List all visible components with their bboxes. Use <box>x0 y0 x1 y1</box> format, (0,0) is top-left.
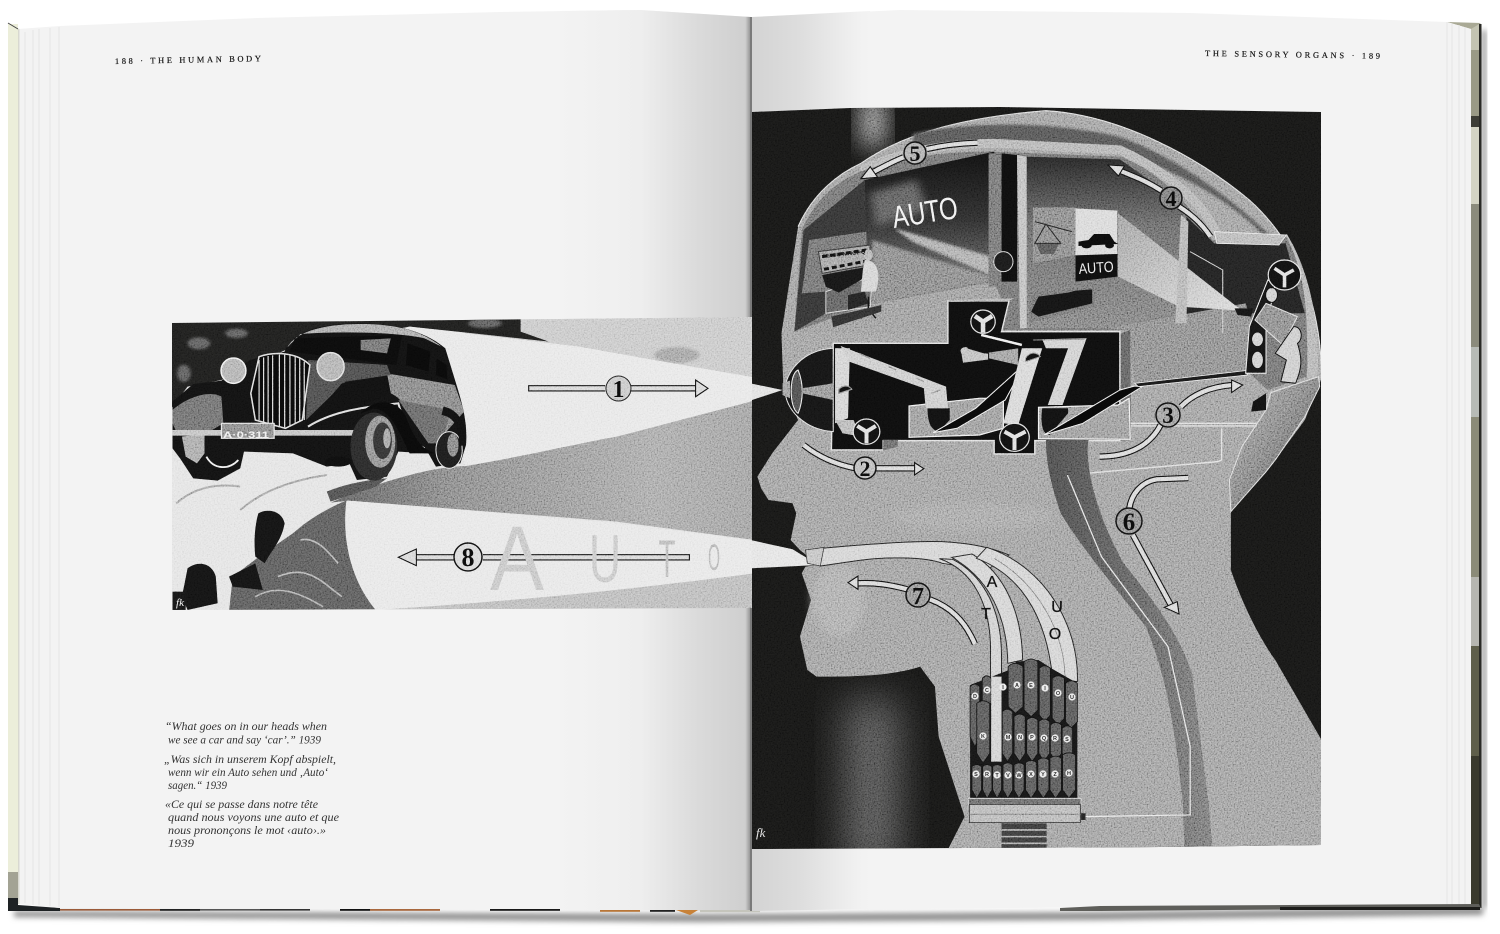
pipe letters: R <box>1053 736 1057 742</box>
skull inner light band <box>861 143 1216 233</box>
caption German: wenn wir ein Auto sehen und ‚Auto‘ <box>168 765 328 779</box>
tree foliage highlights <box>177 319 502 382</box>
operator figure <box>1275 327 1301 383</box>
film belt 2 <box>981 335 1087 425</box>
arrow 2 <box>804 445 924 475</box>
pipe letters: U <box>1070 695 1074 701</box>
badge 3 <box>1156 403 1180 428</box>
pipe letters: X <box>1029 772 1033 778</box>
caption French: «Ce qui se passe dans notre tête <box>165 797 318 811</box>
columns <box>989 153 1002 287</box>
side panel <box>387 373 464 443</box>
rocks <box>182 511 285 610</box>
left room mid tone <box>870 180 928 227</box>
left page <box>18 10 751 911</box>
ceiling ledge <box>1214 232 1286 245</box>
dark film strip 1 <box>933 370 1020 433</box>
gears <box>853 310 1029 451</box>
grass and road edge <box>229 501 376 612</box>
windshield and side windows <box>289 335 402 365</box>
upper highlight <box>862 96 884 146</box>
caption French: nous prononçons le mot ‹auto›.» <box>168 823 326 837</box>
car <box>173 323 466 481</box>
cable-car picture <box>1033 207 1076 263</box>
book: left cover edge <box>8 23 60 911</box>
badge 5 <box>904 141 926 166</box>
gear on column <box>994 252 1013 272</box>
nerve wire <box>1067 475 1190 817</box>
caption French: quand nous voyons une auto et que <box>168 810 339 824</box>
pipe letters: O <box>1056 691 1061 697</box>
left wheel <box>206 457 238 467</box>
panel: car illustration on left page: O <box>708 537 720 578</box>
arrow 8 <box>398 549 690 566</box>
rear wheel <box>436 432 462 468</box>
pipe letters: I <box>1044 686 1046 692</box>
arrow 5 <box>861 143 977 179</box>
license plate <box>221 423 274 438</box>
caption German: sagen.“ 1939 <box>168 778 227 792</box>
car poster <box>1076 208 1118 282</box>
projector <box>1235 303 1297 345</box>
ribbons (throat) <box>805 478 1188 850</box>
pipe letters: V <box>1006 773 1010 779</box>
badge 1: 1 <box>612 377 624 403</box>
badge 8: 8 <box>462 543 474 572</box>
incoming light rays <box>750 383 783 401</box>
arrow 4 <box>1108 165 1211 237</box>
ribbon letter O: O <box>1049 626 1061 643</box>
dark trees <box>172 319 548 408</box>
organ base <box>968 798 1085 823</box>
pipe letters: Q <box>1042 736 1047 742</box>
pipe letters: M <box>1006 735 1011 741</box>
ribbon separator <box>994 558 1065 678</box>
projector beam <box>1118 213 1242 311</box>
pipe letters: D <box>973 694 977 700</box>
pipes block <box>970 660 1077 798</box>
right page <box>750 10 1481 911</box>
skull rim highlight <box>798 111 1321 378</box>
rail post <box>1190 252 1223 333</box>
running head left: 188 · THE HUMAN BODY <box>115 54 261 66</box>
T ribbon <box>939 559 1002 761</box>
caption English: we see a car and say ‘car’.” 1939 <box>168 732 321 746</box>
ribbon letter U: U <box>1051 599 1063 616</box>
organ and operator <box>818 245 881 327</box>
rear rim <box>1283 237 1313 378</box>
caption German <box>164 752 336 792</box>
organ stem <box>1002 823 1047 850</box>
skull shading <box>913 124 1275 240</box>
A ribbon <box>952 554 1023 663</box>
gray strip under cone <box>386 574 752 610</box>
background highlights <box>846 96 898 870</box>
hood <box>306 360 391 420</box>
book: right cover edge with page-edge images <box>1447 22 1482 908</box>
machinery chamber <box>831 298 1131 454</box>
caption block <box>164 719 339 850</box>
shadow below car <box>331 463 350 467</box>
signature text: fk <box>176 597 185 609</box>
badge 8 <box>454 543 482 572</box>
caption French <box>165 797 339 850</box>
lower light cone <box>346 500 349 501</box>
badge 6: 6 <box>1123 509 1135 536</box>
pipe letters: E <box>1029 683 1033 689</box>
pipe letters: K <box>981 734 985 740</box>
pipe letters <box>971 681 1076 779</box>
pipe letters: T <box>995 773 999 779</box>
film belt 1 <box>835 346 948 437</box>
arrow 3 <box>1100 380 1243 457</box>
pipe letters: C <box>985 688 989 694</box>
faint bushes <box>654 346 708 416</box>
front right wheel <box>351 413 397 481</box>
front fender <box>361 402 436 453</box>
pipe letters: R <box>985 772 989 778</box>
organ sign: AEIOU MNOPQ <box>822 249 866 260</box>
panel: head illustration on right page <box>750 96 1322 870</box>
letter T: T <box>658 530 676 589</box>
upper light cone <box>410 326 752 416</box>
wheel top right <box>1268 260 1301 290</box>
left room light band <box>894 228 990 275</box>
left room lower wall <box>872 240 990 304</box>
small projector in chamber <box>960 347 1018 365</box>
road background <box>172 326 752 610</box>
arrow 6 <box>1129 478 1188 614</box>
left fender <box>173 394 223 433</box>
headlights <box>221 358 246 383</box>
train picture <box>1029 288 1094 323</box>
dark rear corner <box>1186 217 1305 318</box>
badge 4 <box>1160 186 1182 211</box>
arrow 7 <box>848 576 975 644</box>
badge 1 <box>606 376 631 403</box>
grain over left illustration <box>172 317 752 610</box>
badge 2: 2 <box>860 456 870 481</box>
radiator grille <box>251 354 310 428</box>
frayed ribbon end <box>805 547 824 566</box>
spoken letters <box>490 526 720 590</box>
arrow 1 <box>528 380 708 397</box>
left room back wall <box>865 152 994 305</box>
rear room right floor <box>1105 303 1253 387</box>
badge 4: 4 <box>1166 186 1176 211</box>
ribbon letters <box>981 574 1063 643</box>
caption German: „Was sich in unserem Kopf abspielt, <box>164 752 336 766</box>
right room wall <box>1026 157 1183 328</box>
left side wall <box>794 180 867 332</box>
screen word AUTO: AUTO <box>890 190 960 235</box>
pipe letters: A <box>1015 683 1019 689</box>
mouth ribbon bundle <box>820 542 1009 570</box>
caption French: 1939 <box>168 836 194 850</box>
caption English: “What goes on in our heads when <box>165 719 327 733</box>
O U ribbon <box>976 547 1077 682</box>
room: back cavity <box>794 152 1307 390</box>
pipe letters: Y <box>1041 772 1045 778</box>
clamp near operator <box>1251 393 1266 412</box>
ribbon letter A: A <box>987 574 998 591</box>
grain over right illustration <box>752 107 1321 849</box>
pipe letters: Z <box>1053 772 1057 778</box>
license plate text: A·0·311 <box>223 430 269 440</box>
neck back piece <box>1229 377 1320 512</box>
dark film strip 2 and path to projector <box>1044 280 1275 435</box>
pipe letters: N <box>1018 735 1022 741</box>
pipe letters: S <box>974 772 978 778</box>
ribbon letter T: T <box>981 606 991 623</box>
sky and far landscape <box>445 317 752 377</box>
badge 7 <box>906 583 930 610</box>
black background <box>752 105 1322 851</box>
letter A: A <box>490 508 545 610</box>
signature right: fk <box>756 825 766 840</box>
signature mark <box>173 592 186 610</box>
horizontal wire to skull base <box>1068 423 1257 475</box>
pipe letters: P <box>1030 735 1034 741</box>
letter U: U <box>589 521 621 597</box>
column right <box>1175 215 1188 323</box>
badge 3: 3 <box>1162 403 1174 428</box>
badge 2 <box>854 456 876 481</box>
pipe letters: I <box>1002 685 1004 691</box>
running head right: THE SENSORY ORGANS · 189 <box>1205 49 1380 61</box>
car body silhouette <box>173 323 466 481</box>
head silhouette <box>757 111 1321 853</box>
mottled tones on face <box>813 503 1053 637</box>
T ribbon over pipes <box>991 677 1002 762</box>
gray band between cones <box>331 399 760 541</box>
spine tube <box>1046 440 1213 853</box>
roof <box>287 324 442 347</box>
organ pipes <box>970 659 1077 798</box>
badge 6 <box>1116 508 1142 536</box>
badge 7: 7 <box>912 584 924 610</box>
badge 5: 5 <box>910 141 920 166</box>
panel: car illustration on left page <box>165 310 760 620</box>
bumper <box>173 430 361 436</box>
pipe letters: W <box>1016 773 1022 779</box>
caption English <box>165 719 327 746</box>
poster word AUTO: AUTO <box>1078 259 1114 278</box>
left page bottom edge: colored page edges <box>60 909 760 915</box>
left room floor <box>794 282 1002 333</box>
pipe letters: H <box>1067 771 1071 777</box>
pipe letters: S <box>1065 737 1069 743</box>
chest highlight <box>846 700 898 870</box>
trays <box>909 398 1130 439</box>
eye <box>783 348 833 432</box>
strip rollers <box>1252 288 1277 369</box>
